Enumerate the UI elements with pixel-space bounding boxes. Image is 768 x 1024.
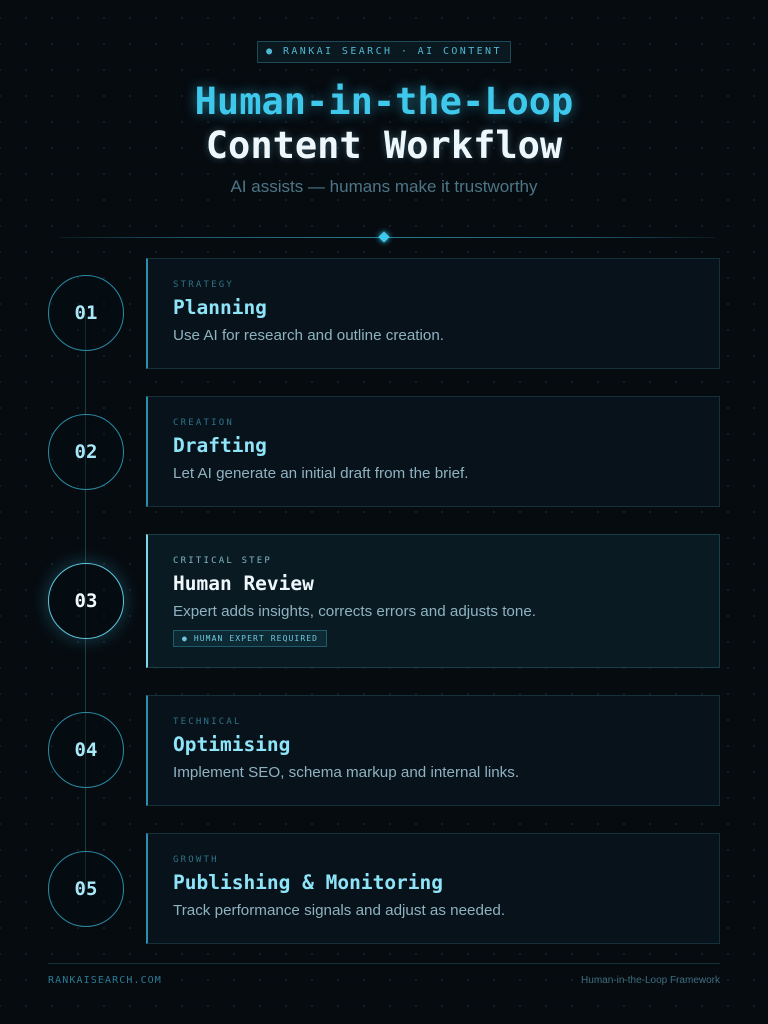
panel: optimising: TECHNICAL <box>173 717 242 727</box>
panel: publishing: GROWTH <box>173 855 219 865</box>
step 4 circle: 04 <box>75 739 97 761</box>
panel: optimising: Implement SEO, schema markup and internal links. <box>173 764 519 781</box>
panel: planning: Planning <box>173 296 267 319</box>
panel: human review: Human Review <box>173 572 314 595</box>
panel: drafting: CREATION <box>173 418 234 428</box>
footer left: RANKAISEARCH.COM <box>48 975 162 986</box>
step 1 circle: 01 <box>75 302 97 324</box>
title line 2: Content Workflow <box>206 124 562 167</box>
step 4 circle <box>48 712 124 788</box>
panel: publishing <box>146 833 720 944</box>
timeline line <box>85 313 86 889</box>
subtitle: AI assists — humans make it trustworthy <box>230 177 538 196</box>
panel: planning <box>146 258 720 369</box>
panel: human review: Expert adds insights, corrects errors and adjusts tone. <box>173 603 536 620</box>
title line 1: Human-in-the-Loop <box>195 80 573 123</box>
panel: planning: Use AI for research and outline creation. <box>173 327 444 344</box>
icon: diamond <box>378 231 390 243</box>
tag: ● HUMAN EXPERT REQUIRED <box>182 634 318 643</box>
panel: drafting: Drafting <box>173 434 267 457</box>
step 5 circle: 05 <box>75 878 97 900</box>
step 3 circle <box>48 563 124 639</box>
badge: ● RANKAI SEARCH · AI CONTENT <box>266 46 502 57</box>
step 3 circle: 03 <box>75 590 97 612</box>
step 2 circle: 02 <box>75 441 97 463</box>
step 1 circle <box>48 275 124 351</box>
panel: planning: STRATEGY <box>173 280 234 290</box>
panel: publishing: Track performance signals and adjust as needed. <box>173 902 505 919</box>
step 2 circle <box>48 414 124 490</box>
footer right: Human-in-the-Loop Framework <box>581 975 720 986</box>
panel: optimising: Optimising <box>173 733 290 756</box>
panel: optimising <box>146 695 720 806</box>
panel: drafting <box>146 396 720 507</box>
panel: human review: CRITICAL STEP <box>173 556 272 566</box>
panel: publishing: Publishing & Monitoring <box>173 871 443 894</box>
panel: drafting: Let AI generate an initial draft from the brief. <box>173 465 468 482</box>
tag <box>173 630 327 647</box>
badge <box>257 41 511 63</box>
panel: human review <box>146 534 720 668</box>
step 5 circle <box>48 851 124 927</box>
